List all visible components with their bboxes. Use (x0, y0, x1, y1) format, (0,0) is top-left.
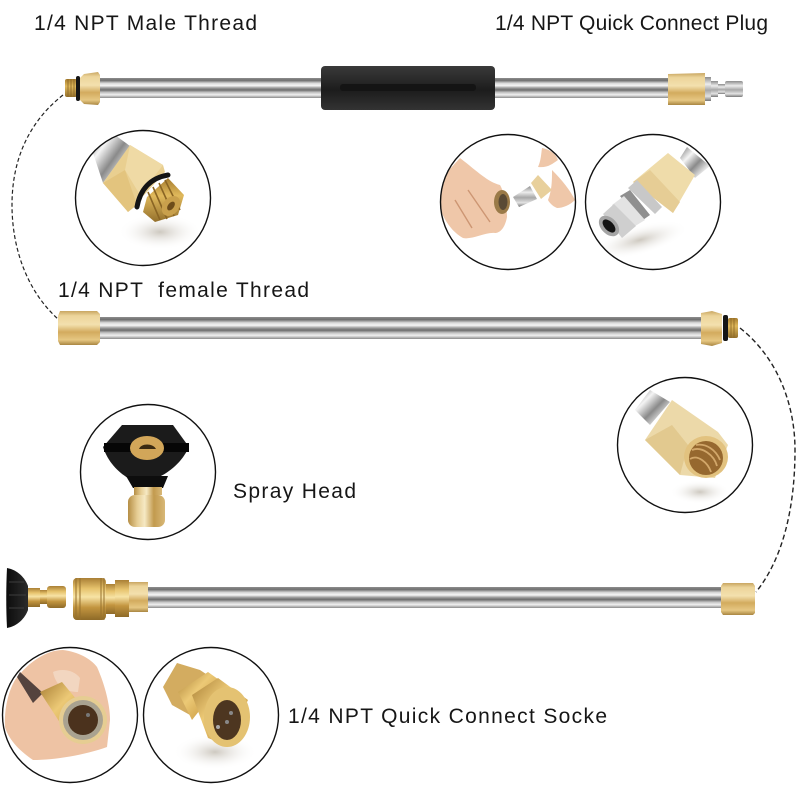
circle: quick connect plug close-up (586, 134, 720, 270)
label: 1/4 NPT female Thread: 1/4 NPT female Thread (58, 279, 309, 302)
socket coupler (73, 578, 106, 620)
male nut (701, 311, 722, 346)
circle: female thread close-up (618, 378, 752, 512)
dashed connector: left (12, 95, 63, 319)
o-ring (723, 315, 728, 341)
thread (728, 318, 738, 338)
wand 2: middle section (58, 311, 738, 346)
wand 1: handle section (65, 66, 743, 110)
quick connect plug (705, 77, 711, 101)
plug nut (668, 73, 705, 105)
label: 1/4 NPT Male Thread: 1/4 NPT Male Thread (34, 12, 257, 35)
circle: male thread close-up (76, 130, 210, 266)
o-ring (76, 76, 80, 101)
circle: hand holding socket (2, 648, 138, 782)
spray nozzle cap (6, 568, 28, 628)
circle: quick connect socket close-up (144, 648, 278, 782)
label: 1/4 NPT Quick Connect Socke: 1/4 NPT Quick Connect Socke (288, 705, 607, 728)
nozzle plug (28, 588, 40, 607)
steel tube (100, 78, 668, 98)
female nut (58, 311, 100, 345)
end nut (721, 583, 755, 615)
rubber grip (321, 66, 495, 110)
label: 1/4 NPT Quick Connect Plug: 1/4 NPT Quick Connect Plug (495, 12, 768, 35)
wand 3: nozzle and socket section (6, 568, 755, 628)
circle: hand connecting plug (440, 134, 576, 270)
hex nut (80, 72, 100, 105)
circle: spray head close-up (80, 404, 216, 540)
dashed connector: right (740, 328, 795, 592)
label: Spray Head: Spray Head (233, 480, 356, 503)
thread (65, 79, 77, 97)
